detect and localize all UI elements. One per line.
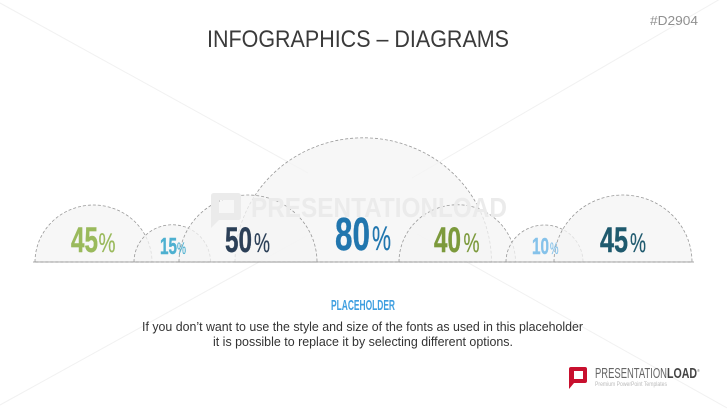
value: 10%: 10 [532,233,549,259]
body text: it is possible to replace it by selecting different options. [213,334,513,349]
code label: #D2904 [650,13,698,28]
value: 40%: % [464,228,480,258]
value: 80%: 80 [335,208,370,260]
value: 80%: % [372,220,391,258]
placeholder heading: PLACEHOLDER [331,297,395,314]
title: INFOGRAPHICS – DIAGRAMS [207,26,509,53]
value: 45% green: % [98,228,116,258]
logo registered mark: ® [697,368,700,373]
value: 40%: 40 [434,221,461,260]
logo tagline: Premium PowerPoint Templates [595,381,668,388]
value: 15%: 15 [160,233,177,259]
watermark icon [211,193,241,228]
value: 45% teal: 45 [600,221,628,260]
baseline [33,261,694,263]
value: 45% teal: % [630,228,646,258]
logo wordmark: PRESENTATION [595,365,667,382]
logo: LOAD [667,365,697,382]
semicircle chart [33,138,694,262]
semicircle: 10% [506,225,583,262]
value: 15%: % [177,239,186,258]
semicircle: 45% green [35,205,152,262]
body text: If you don’t want to use the style and size of the fonts as used in this placeholder [142,319,584,334]
value: 50%: 50 [225,221,252,260]
value: 45% green: 45 [71,221,98,260]
semicircle: 40% [399,205,516,262]
logo [569,365,700,389]
body text [142,319,584,349]
logo icon [569,367,587,389]
watermark text: PRESENTATIONLOAD [251,192,507,223]
semicircle: 45% teal [554,195,692,262]
semicircle: 80% [235,138,492,262]
value: 50%: % [254,228,270,258]
watermark [211,192,507,228]
semicircle: 50% [179,195,317,262]
semicircle: 15% [134,225,210,262]
value: 10%: % [550,239,558,258]
